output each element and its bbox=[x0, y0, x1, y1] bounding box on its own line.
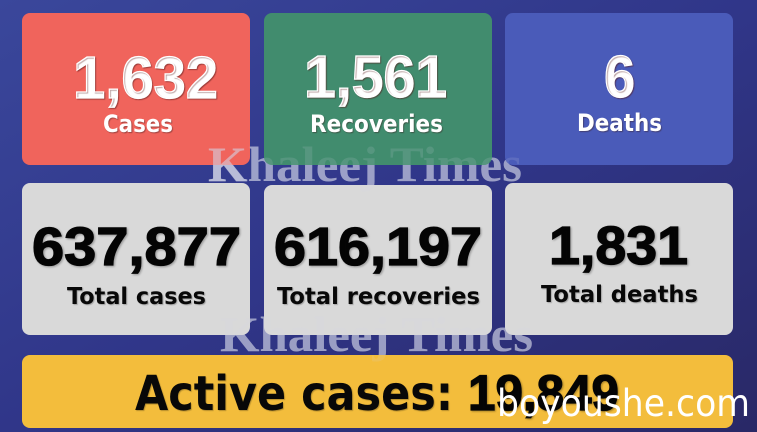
total deaths number: 1,831 bbox=[549, 216, 688, 276]
total deaths label: Total deaths bbox=[541, 282, 698, 308]
panel: daily recoveries bbox=[264, 13, 492, 165]
daily deaths label: Deaths bbox=[577, 109, 662, 137]
total cases number: 637,877 bbox=[32, 217, 241, 277]
daily cases number: 1,632 bbox=[73, 45, 218, 111]
daily deaths number: 6 bbox=[604, 44, 635, 110]
total recoveries label: Total recoveries bbox=[277, 284, 480, 310]
daily cases label: Cases bbox=[103, 110, 173, 138]
watermark: initial letter on red card: K bbox=[208, 136, 247, 192]
watermark: lower, behind cards: Khaleej Times bbox=[220, 306, 533, 362]
active cases label: Active cases: bbox=[135, 366, 453, 422]
total cases label: Total cases bbox=[67, 284, 206, 310]
panel: active cases bbox=[22, 355, 733, 428]
daily recoveries number: 1,561 bbox=[304, 44, 447, 110]
watermark: upper, behind cards: Khaleej Times bbox=[208, 136, 522, 192]
panel: daily deaths bbox=[505, 13, 733, 165]
panel: daily cases bbox=[22, 13, 250, 165]
watermark: faint overlay across cards, lower: Khaleej Times bbox=[220, 306, 533, 362]
active cases number: 19,849 bbox=[468, 365, 619, 421]
panel: total recoveries bbox=[264, 185, 492, 335]
total recoveries number: 616,197 bbox=[274, 217, 482, 277]
panel: total deaths bbox=[505, 183, 733, 335]
watermark: faint overlay across cards, upper: Khaleej Times bbox=[208, 136, 522, 192]
panel: total cases bbox=[22, 183, 250, 335]
daily recoveries label: Recoveries bbox=[310, 110, 443, 138]
